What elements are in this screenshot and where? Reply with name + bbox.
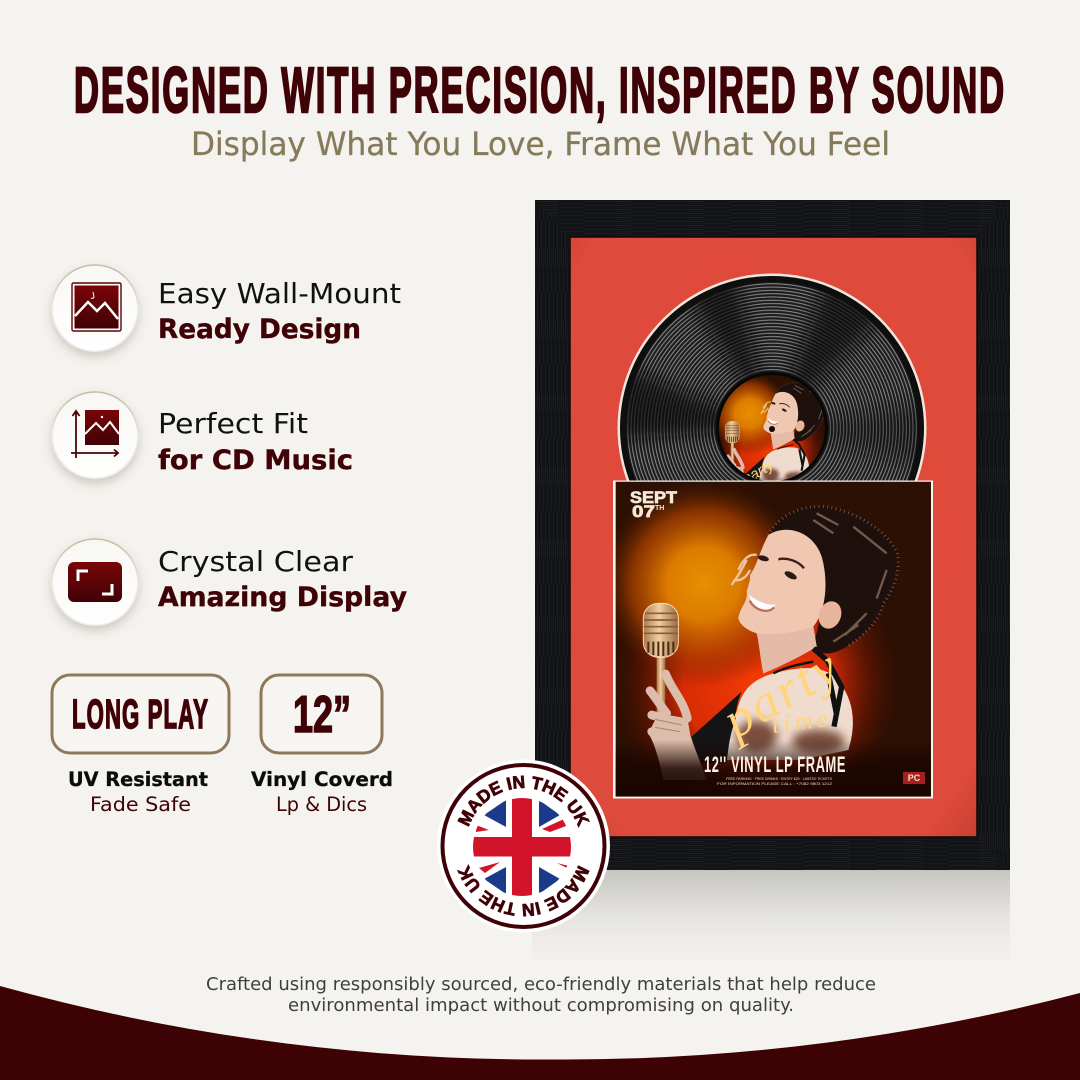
PC logo: PC [908, 773, 921, 783]
badge: long play [52, 675, 229, 753]
album sleeve [613, 480, 933, 798]
feature text: Ready Design [158, 314, 361, 345]
bottom maroon curve [0, 986, 1080, 1080]
date: SEPT [630, 489, 677, 507]
subtitle: Display What You Love, Frame What You Feel [191, 125, 890, 163]
feature text [158, 277, 401, 345]
red mat board [570, 237, 977, 837]
script lettering: time [770, 705, 829, 739]
caption: vinyl covered: Vinyl Coverd [251, 768, 393, 791]
spindle hole [769, 426, 775, 432]
frame reflection shadow [532, 870, 1010, 965]
footer note: Crafted using responsibly sourced, eco-friendly materials that help reduce [206, 975, 876, 995]
seal lettering [456, 775, 590, 917]
feature text [158, 545, 407, 613]
PC logo [903, 772, 925, 784]
feature text: for CD Music [158, 445, 353, 476]
feature text [158, 407, 353, 476]
record centre label: party [739, 456, 778, 488]
script lettering: party [710, 639, 848, 751]
made in the UK seal [437, 760, 610, 932]
icon: picture with dimension arrows [52, 392, 138, 478]
caption: UV resistant: UV Resistant [68, 768, 208, 791]
date [630, 489, 677, 521]
footer note [206, 975, 876, 1016]
seal lettering: MADE IN THE UK [457, 775, 590, 828]
feature: crystal clear [52, 539, 407, 625]
album fine print [717, 777, 833, 786]
feature text: Easy Wall-Mount [158, 277, 401, 310]
caption: UV resistant [68, 768, 208, 816]
record light sheen [626, 286, 917, 472]
feature text: Perfect Fit [158, 407, 308, 440]
feature: perfect fit [52, 392, 353, 478]
feature text: Amazing Display [158, 582, 407, 613]
caption: UV resistant: Fade Safe [90, 793, 191, 816]
icon: wall-mount picture [52, 265, 138, 351]
seal lettering: MADE IN THE UK [456, 864, 590, 917]
icon: union flag [472, 797, 572, 897]
icon: display corners [52, 539, 138, 625]
badge: long play: LONG PLAY [72, 691, 209, 737]
date: 07 [632, 503, 655, 521]
footer note: environmental impact without compromising on quality. [288, 996, 794, 1016]
record centre label [719, 375, 825, 480]
caption: vinyl covered: Lp & Dics [276, 793, 367, 816]
album fine print: FREE PARKING · FREE DRINKS · ENTRY $20 · LIMITED TICKETS [726, 777, 833, 781]
badge: 12 inch [261, 675, 382, 753]
album fine print: FOR INFORMATION PLEASE CALL : +7082 9803 1212 [717, 782, 832, 786]
vinyl record [618, 274, 926, 480]
picture frame [535, 200, 1010, 870]
date: TH [655, 505, 664, 512]
black wooden frame [535, 200, 1010, 870]
badge: 12 inch: 12” [293, 686, 351, 744]
caption: vinyl covered [251, 768, 393, 816]
album title: 12'' VINYL LP FRAME [704, 752, 846, 777]
feature: wall mount [52, 265, 401, 351]
feature text: Crystal Clear [158, 545, 354, 578]
